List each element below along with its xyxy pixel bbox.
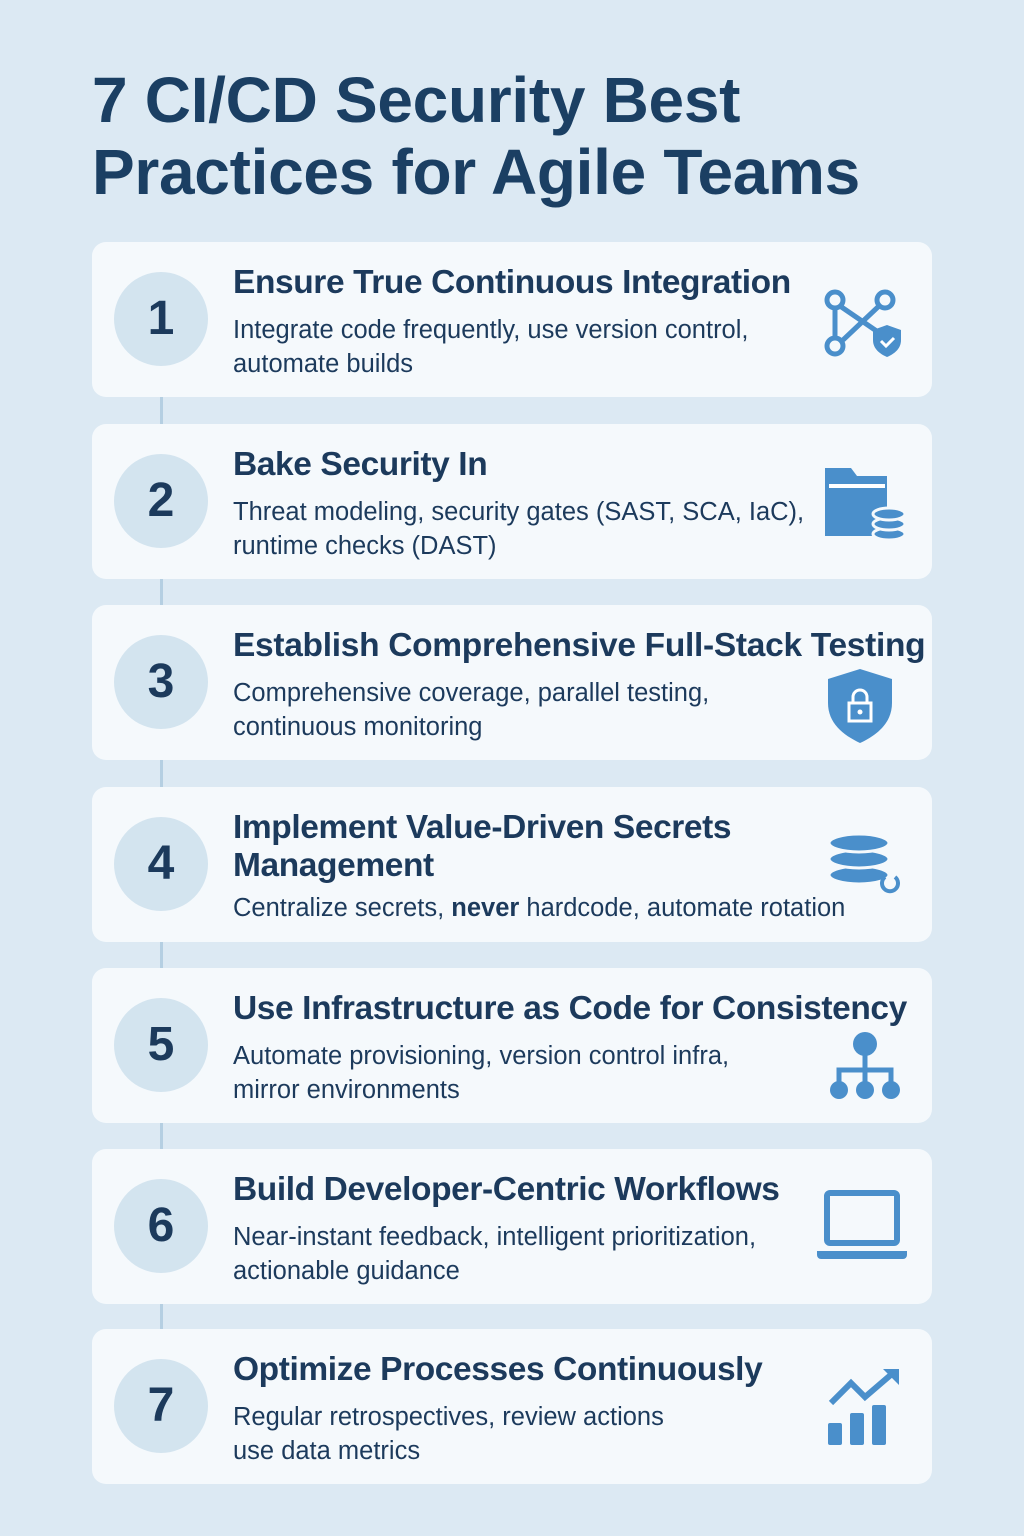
icon: folder database (825, 468, 904, 538)
desc 7 (233, 1403, 664, 1465)
card 3: 3 (148, 655, 174, 708)
desc 3: continuous monitoring (233, 713, 482, 741)
desc 7: Regular retrospectives, review actions (233, 1403, 664, 1431)
desc 7: use data metrics (233, 1437, 420, 1465)
title: 7 CI/CD Security Best (92, 64, 740, 136)
heading 4: Implement Value-Driven Secrets (233, 809, 731, 846)
desc 5 (233, 1042, 729, 1104)
card 1: 1 (148, 292, 174, 345)
title (92, 64, 860, 208)
icon: database (830, 836, 900, 894)
heading 7: Optimize Processes Continuously (233, 1351, 762, 1388)
desc 6: Near-instant feedback, intelligent prioritization, (233, 1223, 756, 1251)
desc 5: Automate provisioning, version control infra, (233, 1042, 729, 1070)
desc 6 (233, 1223, 756, 1285)
card 7 (92, 1329, 932, 1484)
heading 4: Management (233, 847, 434, 884)
card 7: 7 (148, 1379, 174, 1432)
card 4: 4 (148, 837, 174, 890)
card 3 (92, 605, 932, 760)
desc 1: automate builds (233, 350, 413, 378)
desc 1 (233, 316, 748, 378)
icon: laptop (817, 1190, 907, 1259)
icon: shield lock (828, 669, 892, 743)
desc 2: runtime checks (DAST) (233, 532, 497, 560)
icon: hierarchy (830, 1032, 900, 1099)
desc 1: Integrate code frequently, use version control, (233, 316, 748, 344)
card 4 (92, 787, 932, 942)
heading 1: Ensure True Continuous Integration (233, 264, 791, 301)
heading 2: Bake Security In (233, 446, 487, 483)
desc 3: Comprehensive coverage, parallel testing, (233, 679, 709, 707)
card 6: 6 (148, 1199, 174, 1252)
icon: git branch shield (824, 290, 901, 357)
card 2 (92, 424, 932, 579)
title: Practices for Agile Teams (92, 136, 860, 208)
heading 6: Build Developer-Centric Workflows (233, 1171, 779, 1208)
desc 4: Centralize secrets, never hardcode, automate rotation (233, 894, 845, 922)
card 5: 5 (148, 1018, 174, 1071)
icon: growth chart (828, 1369, 899, 1445)
desc 6: actionable guidance (233, 1257, 460, 1285)
heading 5: Use Infrastructure as Code for Consistency (233, 990, 907, 1027)
desc 2: Threat modeling, security gates (SAST, SCA, IaC), (233, 498, 804, 526)
card 6 (92, 1149, 932, 1304)
desc 3 (233, 679, 709, 741)
desc 2 (233, 498, 804, 560)
card 1 (92, 242, 932, 397)
card 2: 2 (148, 474, 174, 527)
desc 5: mirror environments (233, 1076, 460, 1104)
heading 3: Establish Comprehensive Full-Stack Testing (233, 627, 925, 664)
card 5 (92, 968, 932, 1123)
heading 4 (233, 809, 731, 884)
